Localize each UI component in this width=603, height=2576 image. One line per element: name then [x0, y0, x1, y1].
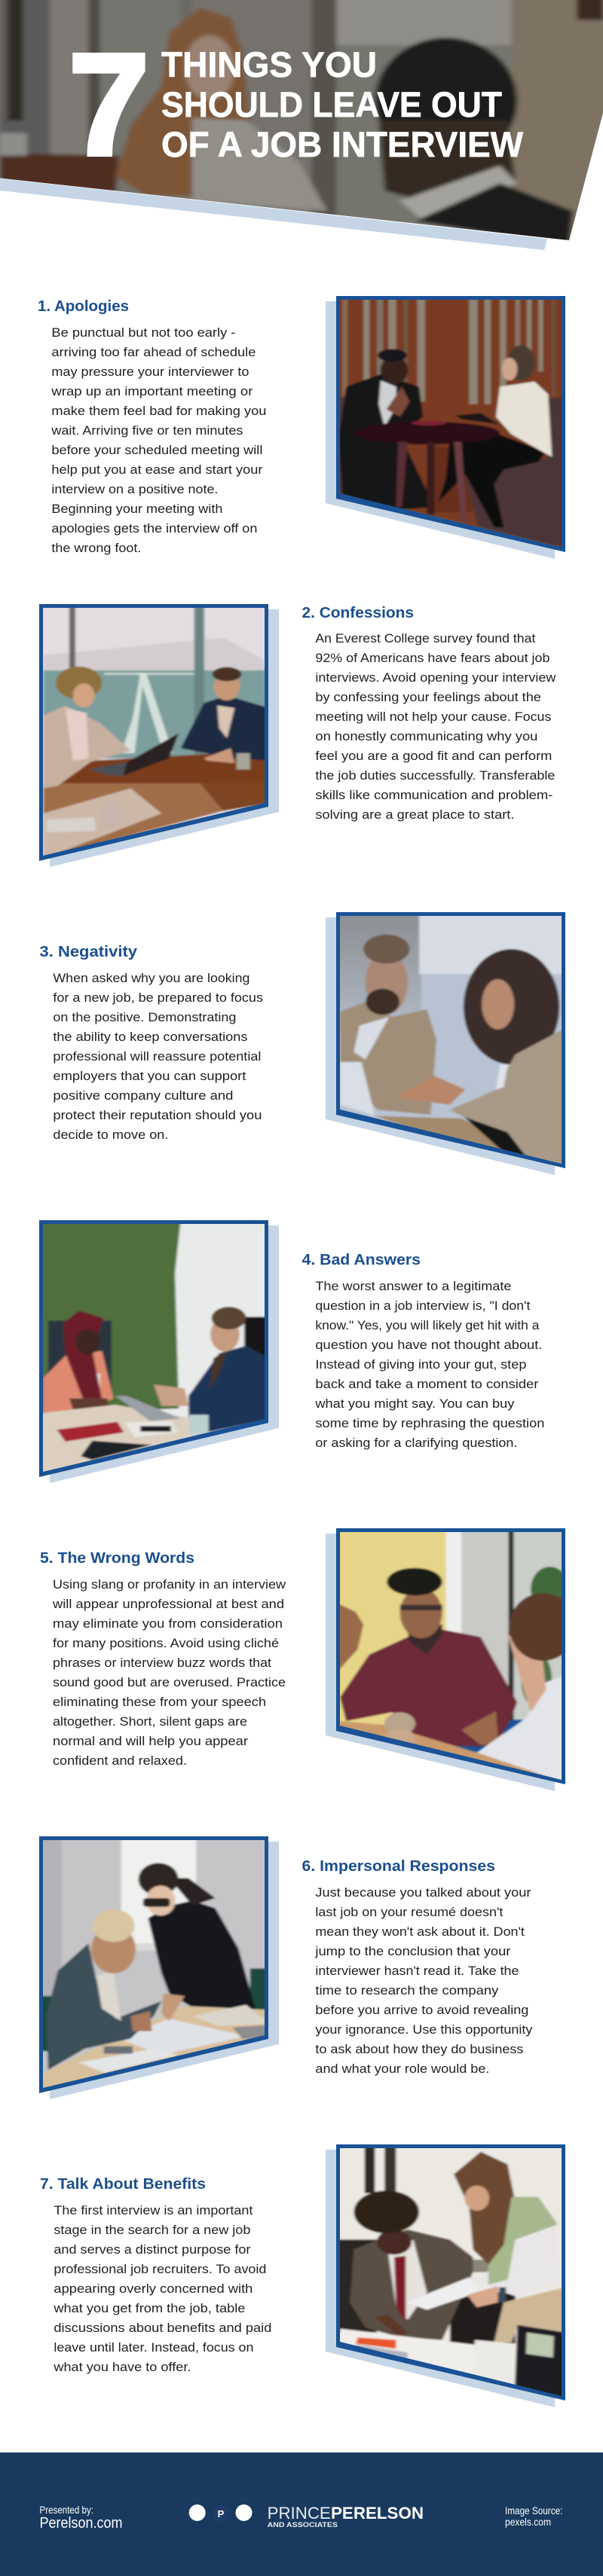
body text: 92% of Americans have fears about job [315, 651, 549, 665]
heading: 2. Confessions [302, 605, 414, 621]
body text: skills like communication and problem- [315, 788, 552, 802]
body text: time to research the company [315, 1983, 499, 1998]
body text: leave until later. Instead, focus on [54, 2340, 253, 2355]
image source credit [505, 2504, 562, 2528]
body text: may eliminate you from consideration [53, 1616, 283, 1631]
body text: interviews. Avoid opening your interview [315, 670, 556, 685]
body text: for many positions. Avoid using cliché [53, 1636, 279, 1650]
section 4: Bad Answers [38, 1220, 544, 1483]
body text: back and take a moment to consider [315, 1377, 539, 1391]
body text: When asked why you are looking [53, 971, 249, 985]
title: SHOULD LEAVE OUT [161, 84, 502, 124]
body text: An Everest College survey found that [315, 631, 536, 646]
body text: apologies gets the interview off on [51, 521, 257, 536]
body text: the ability to keep conversations [53, 1030, 247, 1044]
body text: some time by rephrasing the question [315, 1416, 544, 1430]
body text: jump to the conclusion that your [314, 1944, 511, 1958]
body text: your ignorance. Use this opportunity [315, 2022, 533, 2037]
body text [314, 1885, 533, 2076]
body text: or asking for a clarifying question. [315, 1436, 517, 1450]
photo: interview by living wall [38, 1220, 279, 1483]
body text: on honestly communicating why you [315, 729, 537, 743]
logo: Prince Perelson and Associates: P [218, 2508, 225, 2520]
image source credit: pexels.com [505, 2516, 551, 2528]
body text [314, 1279, 544, 1450]
photo: man in maroon sweater gesturing [326, 1528, 577, 1791]
logo: Prince Perelson and Associates: PERELSON [331, 2504, 424, 2523]
body text: interview on a positive note. [51, 482, 218, 496]
body text: professional will reassure potential [53, 1049, 261, 1064]
body text: by confessing your feelings about the [315, 690, 541, 704]
photo: woman showing document to seated man [326, 2144, 569, 2407]
body text: help put you at ease and start your [51, 462, 263, 477]
section 1: Apologies [38, 296, 569, 559]
body text: before you arrive to avoid revealing [315, 2003, 528, 2017]
body text: Beginning your meeting with [51, 502, 222, 516]
photo: two women reviewing papers [38, 1836, 279, 2099]
body text: The first interview is an important [54, 2203, 253, 2217]
body text: discussions about benefits and paid [54, 2321, 271, 2335]
heading: 4. Bad Answers [302, 1252, 421, 1268]
body text [315, 631, 556, 822]
body text: to ask about how they do business [315, 2042, 523, 2056]
body text [51, 325, 266, 555]
section 6: Impersonal Responses [38, 1836, 533, 2099]
body text: the job duties successfully. Transferable [315, 768, 555, 783]
body text: question in a job interview is, "I don't [315, 1299, 531, 1313]
heading: 6. Impersonal Responses [302, 1858, 495, 1875]
body text: Just because you talked about your [315, 1885, 531, 1900]
body text: professional job recruiters. To avoid [54, 2262, 266, 2276]
section 5: The Wrong Words [40, 1528, 577, 1791]
footer [0, 2452, 603, 2576]
banner accent strip [0, 179, 547, 250]
heading: 5. The Wrong Words [40, 1550, 194, 1567]
section 2: Confessions [38, 604, 556, 867]
numeral 7: 7 [69, 23, 149, 185]
section 3: Negativity [39, 912, 569, 1175]
body text [53, 2203, 271, 2374]
body text: Instead of giving into your gut, step [315, 1357, 526, 1372]
body text: on the positive. Demonstrating [53, 1010, 236, 1024]
body text: what you have to offer. [53, 2360, 191, 2374]
body text: and what your role would be. [315, 2062, 489, 2076]
presented by credit [39, 2504, 122, 2532]
body text: decide to move on. [53, 1128, 168, 1142]
body text: employers that you can support [53, 1069, 246, 1083]
image source credit: Image Source: [505, 2504, 562, 2516]
logo: Prince Perelson and Associates: PRINCE [268, 2504, 331, 2523]
body text: solving are a great place to start. [315, 807, 514, 822]
body text [53, 971, 263, 1142]
heading: 1. Apologies [38, 298, 129, 315]
body text: the wrong foot. [51, 541, 141, 555]
body text: make them feel bad for making you [51, 404, 266, 418]
body text: stage in the search for a new job [54, 2223, 250, 2237]
body text: wrap up an important meeting or [51, 384, 253, 398]
body text: eliminating these from your speech [53, 1695, 266, 1709]
body text: and serves a distinct purpose for [54, 2242, 251, 2257]
body text: appearing overly concerned with [54, 2281, 253, 2296]
body text: normal and will help you appear [53, 1734, 248, 1748]
body text: know." Yes, you will likely get hit with a [315, 1318, 540, 1332]
title: THINGS YOU [161, 44, 377, 84]
body text: wait. Arriving five or ten minutes [51, 423, 243, 438]
body text: mean they won't ask about it. Don't [315, 1924, 525, 1939]
body text: interviewer hasn't read it. Take the [315, 1964, 519, 1978]
body text: feel you are a good fit and can perform [315, 749, 552, 763]
title [161, 44, 524, 164]
body text: Be punctual but not too early - [51, 325, 235, 340]
photo: two people at round table [326, 296, 569, 559]
title: OF A JOB INTERVIEW [161, 124, 524, 164]
section 7: Talk About Benefits [40, 2144, 569, 2407]
body text: arriving too far ahead of schedule [51, 345, 256, 359]
body text: may pressure your interviewer to [51, 365, 249, 379]
body text: what you might say. You can buy [314, 1396, 515, 1411]
body text: will appear unprofessional at best and [52, 1597, 284, 1611]
body text [52, 1577, 286, 1768]
presented by credit: Presented by: [39, 2504, 93, 2516]
logo: Prince Perelson and Associates: AND ASSOCIATES [268, 2521, 338, 2529]
heading: 7. Talk About Benefits [40, 2176, 206, 2193]
body text: phrases or interview buzz words that [53, 1656, 271, 1670]
photo: meeting with laptop at window [38, 604, 279, 867]
heading: 3. Negativity [39, 944, 138, 960]
presented by credit: Perelson.com [39, 2515, 122, 2532]
body text: altogether. Short, silent gaps are [53, 1714, 247, 1729]
banner photo [0, 0, 603, 246]
body text: what you get from the job, table [53, 2301, 245, 2315]
logo: Prince Perelson and Associates [189, 2504, 424, 2529]
body text: The worst answer to a legitimate [315, 1279, 511, 1293]
body text: positive company culture and [53, 1088, 233, 1103]
body text: sound good but are overused. Practice [53, 1675, 286, 1689]
body text: confident and relaxed. [53, 1753, 187, 1768]
body text: meeting will not help your cause. Focus [315, 710, 551, 724]
body text: last job on your resumé doesn't [315, 1905, 504, 1919]
header banner [0, 0, 603, 250]
body text: Using slang or profanity in an interview [53, 1577, 286, 1592]
body text: question you have not thought about. [315, 1338, 542, 1352]
body text: before your scheduled meeting will [51, 443, 262, 457]
body text: for a new job, be prepared to focus [53, 990, 263, 1005]
photo: man and woman talking [326, 912, 569, 1175]
body text: protect their reputation should you [53, 1108, 262, 1122]
